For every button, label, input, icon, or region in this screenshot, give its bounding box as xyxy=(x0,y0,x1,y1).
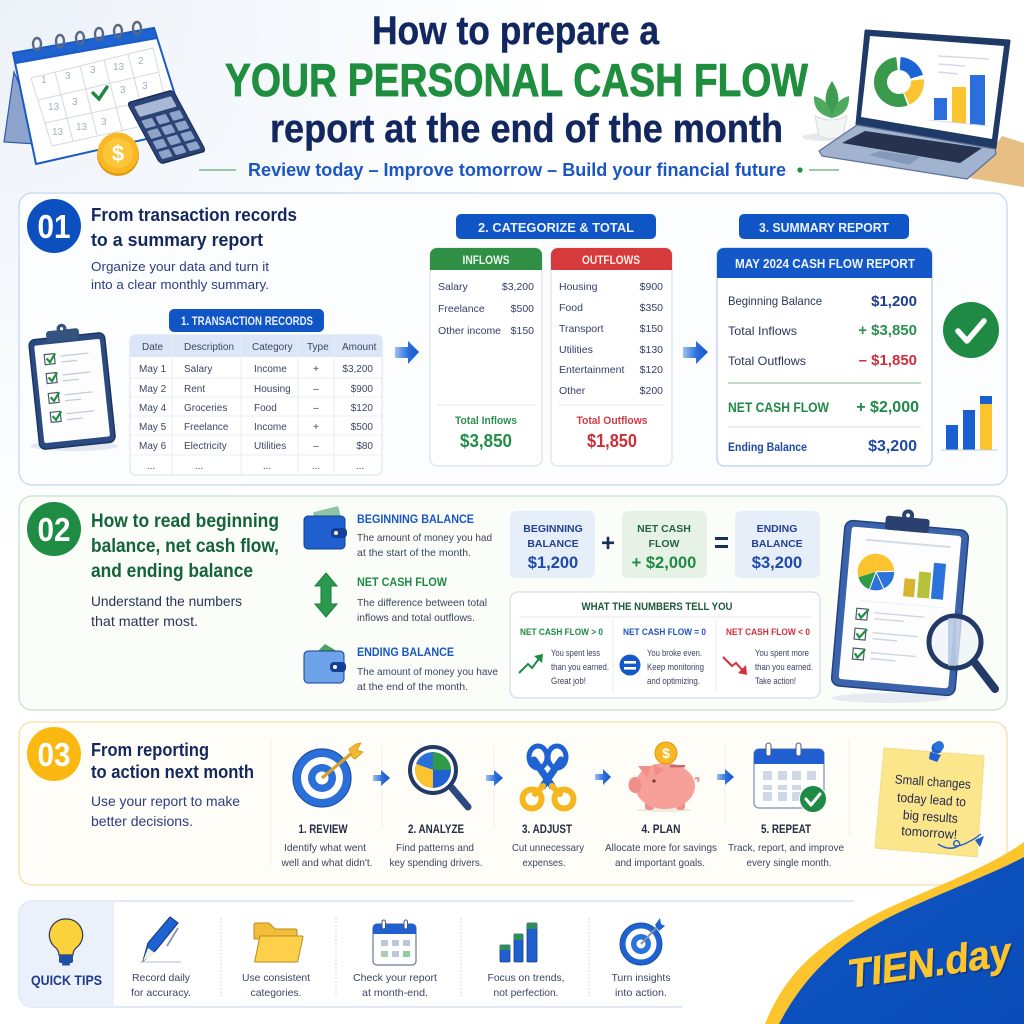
badge 01 xyxy=(27,199,81,253)
tip: record daily: for accuracy. xyxy=(131,987,191,999)
icon: report clipboard with magnifier xyxy=(831,504,995,703)
icon: mini bar chart xyxy=(941,396,998,450)
inflows card: Total Inflows xyxy=(455,415,517,427)
transaction table: Type xyxy=(307,342,329,353)
icon: checklist clipboard xyxy=(27,319,118,451)
transaction table: $3,200 xyxy=(342,364,373,375)
summary report card: + $3,850 xyxy=(858,322,917,339)
transaction table: ... xyxy=(195,461,203,472)
transaction table: ... xyxy=(356,461,364,472)
transaction table: + xyxy=(313,364,319,375)
icon: laptop with charts, plant and desk xyxy=(802,31,1024,187)
outflows card: $120 xyxy=(640,364,663,376)
net cash flow definition xyxy=(357,577,487,624)
summary report card: Total Inflows xyxy=(728,324,797,338)
heading 02: and ending balance xyxy=(91,561,253,582)
badge 02 xyxy=(27,502,81,556)
transaction table: Utilities xyxy=(254,441,286,452)
icon: desk calendar with calculator and coin: 1 xyxy=(41,75,47,86)
tip: check report: at month-end. xyxy=(362,987,428,999)
transaction table: Description xyxy=(184,342,234,353)
summary report card: + $2,000 xyxy=(856,399,919,416)
equation: net cash flow: FLOW xyxy=(649,538,680,550)
beginning balance definition: at the start of the month. xyxy=(357,547,471,559)
transaction table: $900 xyxy=(351,384,373,395)
step: repeat: Track, report, and improve xyxy=(728,842,844,854)
card: what the numbers tell you: WHAT THE NUMBERS TELL YOU xyxy=(582,601,733,613)
step: analyze: 2. ANALYZE xyxy=(408,824,464,836)
icon: desk calendar with calculator and coin xyxy=(4,22,206,176)
step: repeat: every single month. xyxy=(746,857,832,869)
transaction table: Income xyxy=(254,422,287,433)
arrow xyxy=(486,770,503,786)
step: plan: $ xyxy=(662,745,670,761)
inflows card: $3,850 xyxy=(460,431,512,451)
transaction table: Electricity xyxy=(184,441,227,452)
net cash flow definition: NET CASH FLOW xyxy=(357,577,447,589)
badge 01: 01 xyxy=(38,208,70,245)
outflows card: OUTFLOWS xyxy=(582,255,640,267)
transaction table: + xyxy=(313,422,319,433)
tip: record daily: Record daily xyxy=(132,972,191,984)
transaction table: Income xyxy=(254,364,287,375)
tip: focus on trends: Focus on trends, xyxy=(488,972,564,984)
summary report card: MAY 2024 CASH FLOW REPORT xyxy=(735,257,915,271)
icon: desk calendar with calculator and coin: 13 xyxy=(76,122,88,133)
tip: turn insights xyxy=(612,918,670,999)
subtitle tagline: Review today – Improve tomorrow – Build your financial future xyxy=(248,159,786,180)
heading 01 xyxy=(91,205,297,250)
sticky note: tomorrow! xyxy=(901,823,958,842)
tip: record daily xyxy=(131,917,191,999)
arrow xyxy=(373,770,390,786)
step: plan xyxy=(605,742,717,869)
transaction table: Salary xyxy=(184,364,212,375)
net cash flow definition: inflows and total outflows. xyxy=(357,612,475,624)
inflows card: $500 xyxy=(511,303,534,315)
case: negative: You spent more xyxy=(755,648,809,658)
transaction table: – xyxy=(313,403,319,414)
equation: ending balance xyxy=(735,511,820,578)
transaction table: ... xyxy=(312,461,320,472)
outflows card: Transport xyxy=(559,323,604,335)
step: adjust xyxy=(512,746,585,869)
title: YOUR PERSONAL CASH FLOW xyxy=(225,54,808,106)
transaction table: ... xyxy=(263,461,271,472)
net cash flow definition: The difference between total xyxy=(357,597,487,609)
outflows card: $1,850 xyxy=(587,431,637,451)
tip: focus on trends xyxy=(488,923,564,999)
step: review: 1. REVIEW xyxy=(298,824,348,836)
step: repeat xyxy=(728,743,844,869)
ending balance definition: ENDING BALANCE xyxy=(357,647,454,659)
transaction table: ... xyxy=(147,461,155,472)
summary report card: Ending Balance xyxy=(728,440,807,454)
icon: up-down arrow xyxy=(315,573,337,617)
step: review: Identify what went xyxy=(284,842,366,854)
summary report card: $3,200 xyxy=(868,438,917,455)
step: analyze: key spending drivers. xyxy=(390,857,482,869)
equation: beginning balance: BEGINNING xyxy=(523,523,583,535)
outflows card: $200 xyxy=(640,385,663,397)
tip: check report xyxy=(353,920,437,999)
equation: net cash flow xyxy=(622,511,707,578)
case: negative: NET CASH FLOW < 0 xyxy=(726,627,810,638)
inflows card: Freelance xyxy=(438,303,485,315)
sticky note: big results xyxy=(902,807,959,826)
brand corner: TIEN.day swoosh: TIEN.day xyxy=(850,931,1014,999)
case: zero: Keep monitoring xyxy=(647,662,704,672)
outflows card: $900 xyxy=(640,281,663,293)
outflows card: Food xyxy=(559,302,583,314)
transaction table: May 6 xyxy=(139,441,167,452)
case: zero: NET CASH FLOW = 0 xyxy=(623,627,706,638)
heading 01: From transaction records xyxy=(91,205,297,225)
description 01: Organize your data and turn it xyxy=(91,259,269,274)
sticky note xyxy=(875,741,984,857)
icon: desk calendar with calculator and coin: 3 xyxy=(72,97,78,108)
brand corner: TIEN.day swoosh: TIEN.day xyxy=(848,929,1012,997)
tip: turn insights: into action. xyxy=(615,987,667,999)
summary report card: Total Outflows xyxy=(728,354,806,368)
equation: ending balance: ENDING xyxy=(757,523,797,535)
outflows card: Housing xyxy=(559,281,598,293)
icon: desk calendar with calculator and coin: 3 xyxy=(90,65,96,76)
equation: ending balance: BALANCE xyxy=(751,538,803,550)
equation: ending balance: $3,200 xyxy=(752,554,802,572)
case: positive: NET CASH FLOW > 0 xyxy=(520,627,603,638)
case: negative xyxy=(723,627,813,686)
step: adjust: expenses. xyxy=(522,857,566,869)
description 02: that matter most. xyxy=(91,613,198,629)
icon: push pin xyxy=(929,741,944,762)
case: positive: You spent less xyxy=(551,648,600,658)
description 01: into a clear monthly summary. xyxy=(91,277,269,292)
description 03: Use your report to make xyxy=(91,793,240,809)
icon: desk calendar with calculator and coin: 3 xyxy=(142,81,148,92)
transaction table: Rent xyxy=(184,384,205,395)
transaction table: Housing xyxy=(254,384,291,395)
outflows card: $350 xyxy=(640,302,663,314)
title: How to prepare a xyxy=(372,9,660,53)
transaction table: $120 xyxy=(351,403,373,414)
step 2 badge: 2. CATEGORIZE & TOTAL xyxy=(478,220,634,235)
icon: desk calendar with calculator and coin: 13 xyxy=(48,102,60,113)
tip: consistent categories: categories. xyxy=(250,987,302,999)
outflows card: $130 xyxy=(640,344,663,356)
transaction table: $500 xyxy=(351,422,373,433)
outflows card xyxy=(551,248,672,466)
step 1 badge xyxy=(169,309,324,332)
transaction table: – xyxy=(313,384,319,395)
outflows card: Entertainment xyxy=(559,364,624,376)
sticky note: Small changes xyxy=(894,772,972,792)
icon: green check xyxy=(943,302,999,358)
sticky note: today lead to xyxy=(897,790,967,809)
inflows card: $3,200 xyxy=(502,281,534,293)
icon: wallet blue xyxy=(304,506,347,549)
equation: net cash flow: NET CASH xyxy=(637,523,691,535)
quick tips label: QUICK TIPS xyxy=(31,972,102,988)
description 02: Understand the numbers xyxy=(91,593,242,609)
case: positive xyxy=(519,627,609,686)
tip: consistent categories: Use consistent xyxy=(242,972,310,984)
ending balance definition xyxy=(357,647,498,693)
summary report card: – $1,850 xyxy=(859,352,917,369)
step: plan: and important goals. xyxy=(615,857,705,869)
summary report card: $1,200 xyxy=(871,293,917,310)
outflows card: Other xyxy=(559,385,586,397)
plus sign: + xyxy=(601,530,615,557)
case: zero: and optimizing. xyxy=(647,676,700,686)
outflows card: $150 xyxy=(640,323,663,335)
ending balance definition: The amount of money you have xyxy=(357,666,498,678)
step 3 badge xyxy=(739,214,909,239)
title: report at the end of the month xyxy=(270,107,783,151)
step: adjust: 3. ADJUST xyxy=(522,824,572,836)
step: repeat: 5. REPEAT xyxy=(761,824,811,836)
transaction table: Category xyxy=(252,342,293,353)
tip: turn insights: Turn insights xyxy=(612,972,670,984)
heading 01: to a summary report xyxy=(91,230,263,250)
equation: beginning balance: BALANCE xyxy=(527,538,579,550)
badge 02: 02 xyxy=(38,511,70,548)
panel: 03 from reporting to action xyxy=(19,722,1007,885)
beginning balance definition: The amount of money you had xyxy=(357,532,492,544)
case: negative: Take action! xyxy=(755,676,796,686)
heading 03 xyxy=(91,740,254,782)
step: plan: 4. PLAN xyxy=(642,824,680,836)
panel: 01 transaction records to summary report xyxy=(19,193,1007,485)
heading 03: From reporting xyxy=(91,740,209,760)
arrow xyxy=(595,769,611,785)
inflows card: Other income xyxy=(438,325,501,337)
tip: focus on trends: not perfection. xyxy=(494,987,558,999)
icon: desk calendar with calculator and coin: 3 xyxy=(101,117,107,128)
case: zero xyxy=(620,627,706,686)
summary report card: Beginning Balance xyxy=(728,294,822,308)
step: review: well and what didn't. xyxy=(281,857,372,869)
ending balance definition: at the end of the month. xyxy=(357,681,468,693)
inflows card: Salary xyxy=(438,281,469,293)
equals sign xyxy=(715,537,728,548)
beginning balance definition xyxy=(357,514,492,559)
step 1 badge: 1. TRANSACTION RECORDS xyxy=(181,316,313,328)
case: positive: Great job! xyxy=(551,676,586,686)
description 02 xyxy=(91,593,242,629)
transaction table: May 1 xyxy=(139,364,167,375)
icon: desk calendar with calculator and coin: $ xyxy=(112,141,124,166)
heading 02: balance, net cash flow, xyxy=(91,536,279,557)
icon: desk calendar with calculator and coin: 13 xyxy=(52,127,64,138)
outflows card: Utilities xyxy=(559,344,593,356)
inflows card xyxy=(430,248,542,466)
transaction table: May 5 xyxy=(139,422,167,433)
equation: net cash flow: + $2,000 xyxy=(632,554,696,572)
tip: check report: Check your report xyxy=(353,972,437,984)
transaction table: – xyxy=(313,441,319,452)
panel: quick tips xyxy=(19,901,854,1007)
panel: 02 how to read balances xyxy=(19,496,1007,710)
brand corner: TIEN.day swoosh xyxy=(765,842,1024,1024)
transaction table xyxy=(130,335,382,475)
icon: light bulb xyxy=(49,919,83,966)
summary report card xyxy=(717,248,932,466)
badge 03: 03 xyxy=(38,736,70,773)
transaction table: Food xyxy=(254,403,277,414)
icon: desk calendar with calculator and coin: 2 xyxy=(138,56,144,67)
step: analyze xyxy=(390,747,482,869)
heading 02 xyxy=(91,511,279,582)
beginning balance definition: BEGINNING BALANCE xyxy=(357,514,474,526)
transaction table: Date xyxy=(142,342,164,353)
inflows card: $150 xyxy=(511,325,534,337)
description 03: better decisions. xyxy=(91,813,193,829)
summary report card: NET CASH FLOW xyxy=(728,399,830,415)
step: adjust: Cut unnecessary xyxy=(512,842,585,854)
title xyxy=(225,9,808,151)
card: what the numbers tell you xyxy=(510,592,820,698)
step 2 badge xyxy=(456,214,656,239)
transaction table: Freelance xyxy=(184,422,229,433)
equation: beginning balance xyxy=(510,511,595,578)
case: positive: than you earned. xyxy=(551,662,609,672)
transaction table: Groceries xyxy=(184,403,227,414)
heading 03: to action next month xyxy=(91,762,254,782)
case: negative: than you earned. xyxy=(755,662,813,672)
inflows card: INFLOWS xyxy=(462,255,510,267)
transaction table: May 2 xyxy=(139,384,167,395)
tip: consistent categories xyxy=(242,923,310,999)
icon: desk calendar with calculator and coin: 3 xyxy=(120,85,126,96)
description 03 xyxy=(91,793,240,829)
step: analyze: Find patterns and xyxy=(396,842,474,854)
icon: desk calendar with calculator and coin: 13 xyxy=(113,62,125,73)
transaction table: Amount xyxy=(342,342,377,353)
transaction table: May 4 xyxy=(139,403,167,414)
arrow: records to categories xyxy=(395,341,419,364)
outflows card: Total Outflows xyxy=(576,415,648,427)
icon: wallet light blue xyxy=(304,644,346,683)
icon: desk calendar with calculator and coin: 3 xyxy=(65,71,71,82)
step: review xyxy=(281,743,372,869)
arrow xyxy=(717,769,734,785)
transaction table: $80 xyxy=(356,441,373,452)
badge 03 xyxy=(27,727,81,781)
description 01 xyxy=(91,259,269,292)
arrow: categories to summary xyxy=(683,341,708,364)
case: zero: You broke even. xyxy=(647,648,702,658)
step 3 badge: 3. SUMMARY REPORT xyxy=(759,220,889,235)
heading 02: How to read beginning xyxy=(91,511,279,532)
step: plan: Allocate more for savings xyxy=(605,842,717,854)
equation: beginning balance: $1,200 xyxy=(528,554,578,572)
